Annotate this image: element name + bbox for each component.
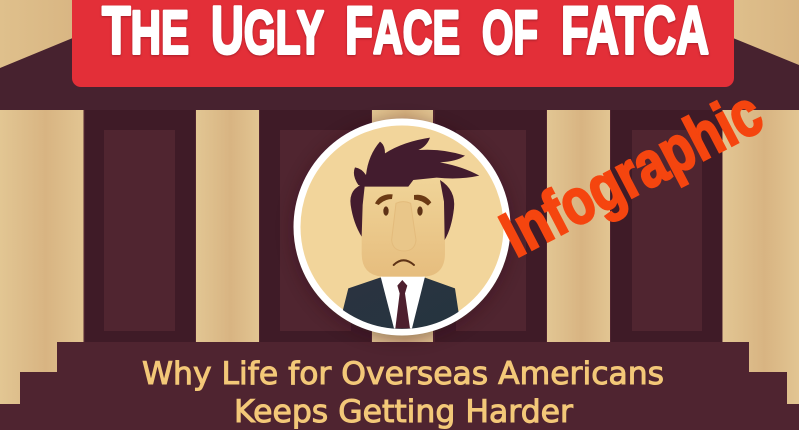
column 3: [372, 110, 433, 342]
subtitle line 2: Keeps Getting Harder: [234, 394, 573, 430]
subtitle: [142, 356, 664, 430]
door panel 2: [260, 110, 371, 342]
title: [102, 0, 709, 68]
left eyebrow: [375, 194, 393, 205]
portrait circle: [297, 122, 507, 332]
side hair right: [440, 180, 454, 240]
title: OF: [482, 0, 538, 66]
right stepped column: [722, 110, 799, 404]
column 2: [196, 110, 259, 342]
roof right: [725, 0, 799, 65]
mouth: [394, 260, 414, 265]
nose: [392, 202, 416, 251]
right eyebrow: [414, 195, 431, 206]
door panel 4: [611, 110, 722, 342]
left stepped column: [0, 110, 84, 404]
column 4: [547, 110, 610, 342]
left eye: [383, 206, 389, 216]
suit: [342, 278, 458, 329]
face: [362, 198, 445, 277]
door panel 1: [85, 110, 195, 342]
shirt collar: [381, 277, 425, 328]
subtitle line 1: Why Life for Overseas Americans: [142, 356, 664, 392]
roof left: [0, 0, 80, 68]
hair: [354, 138, 479, 187]
right eye: [417, 206, 423, 216]
roof band: [0, 30, 799, 110]
door panel 3: [435, 110, 546, 342]
man figure: [340, 138, 479, 342]
tie: [395, 280, 410, 328]
portrait: [294, 122, 510, 342]
title banner: [72, 0, 734, 87]
portrait shadow: [294, 122, 510, 338]
side hair left: [350, 183, 365, 237]
